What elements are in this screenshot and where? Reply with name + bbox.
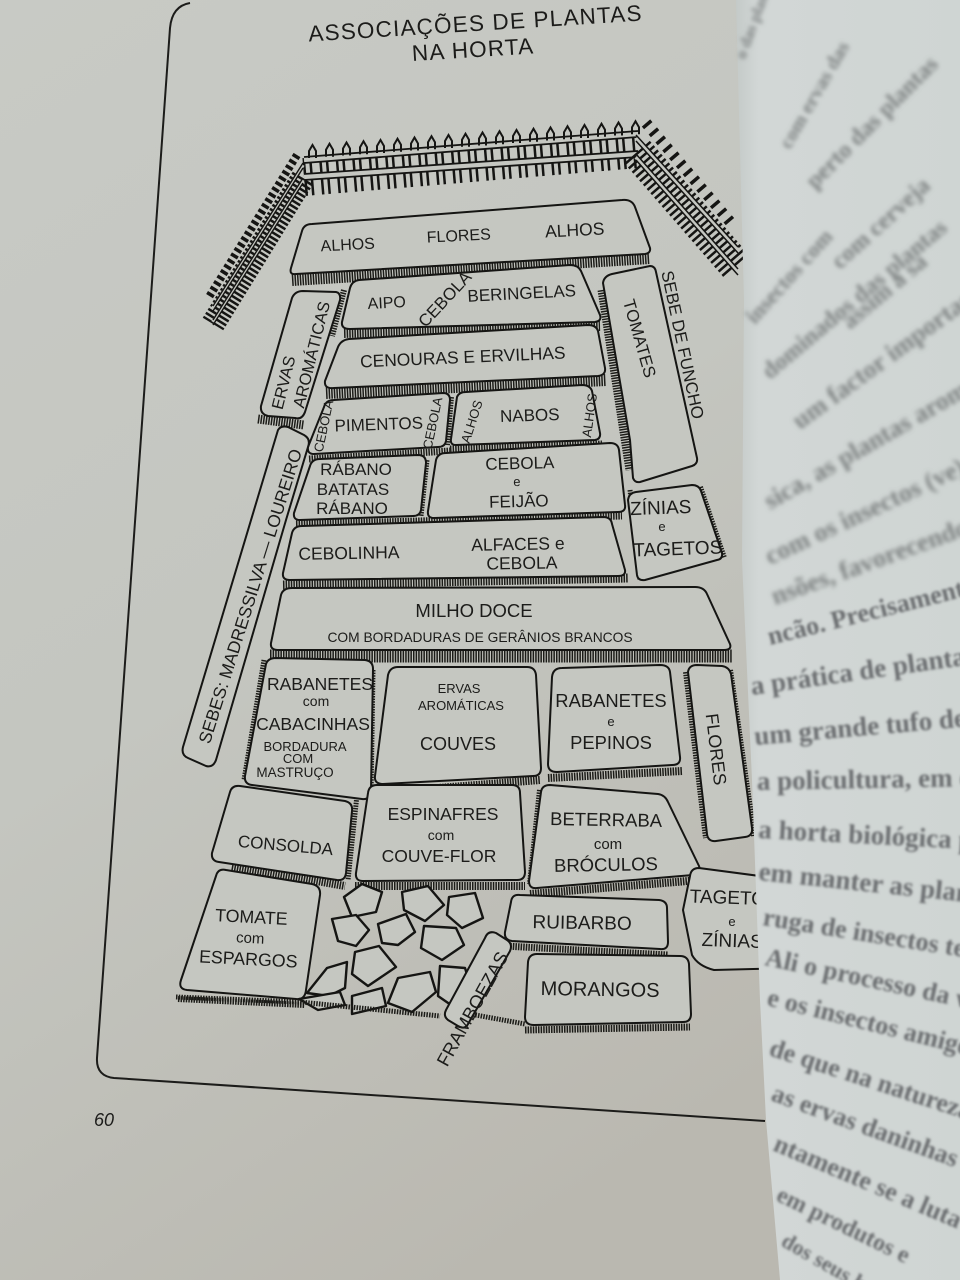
- blurred text: upper lines: dominados das plantas: [757, 215, 953, 385]
- bed: alhos, flores, alhos: ALHOS: [320, 236, 375, 255]
- bed: tagetes e zínias: [683, 868, 790, 970]
- bed: tomate com espargos: [180, 870, 320, 999]
- bed: zínias e tagetes: TAGETOS: [633, 537, 723, 562]
- bed: cebolinha, alfaces e cebola: CEBOLINHA: [298, 542, 400, 564]
- bed: rabanetes com cabacinhas: CABACINHAS: [256, 714, 370, 734]
- bed: morangos: [525, 954, 691, 1025]
- fence: back section: [304, 121, 639, 180]
- bed: pimentos: CEBOLA: [420, 395, 445, 450]
- bed: rabanetes e pepinos: PEPINOS: [570, 732, 652, 753]
- bed: cenouras e ervilhas: [325, 325, 605, 388]
- bed: alhos, flores, alhos: FLORES: [426, 226, 491, 247]
- right book page with blurred text: [733, 0, 960, 1280]
- bed: beterraba com bróculos: com: [594, 836, 622, 853]
- bed: cebola e feijão: FEIJÃO: [489, 491, 549, 512]
- bed: tomate com espargos: com: [236, 929, 265, 948]
- bed: aipo, cebola, beringelas: CEBOLA: [415, 267, 476, 331]
- blurred text: upper lines: assim a sa: [837, 249, 933, 335]
- fence: [209, 121, 738, 325]
- bed: ruibarbo: RUIBARBO: [532, 912, 632, 935]
- bed: framboezas: FRAMBOEZAS: [432, 948, 512, 1070]
- bed: rábano, batatas, rábano: BATATAS: [317, 480, 389, 499]
- bed: tagetes e zínias: e: [728, 914, 736, 929]
- bed: tomates, sebe de funcho: [603, 266, 707, 482]
- bed: cenouras e ervilhas: CENOURAS E ERVILHAS: [360, 343, 566, 371]
- bed: nabos: ALHOS: [579, 392, 600, 438]
- bed: ervas aromáticas, couves: ERVAS: [438, 681, 481, 696]
- bed: ervas aromáticas: ERVAS: [269, 354, 299, 411]
- blurred text: lower lines: em produtos e: [772, 1182, 914, 1269]
- bed: tomates, sebe de funcho: TOMATES: [619, 297, 660, 380]
- page frame: [97, 3, 765, 1121]
- bed: beterraba com bróculos: BETERRABA: [550, 808, 663, 831]
- page number: 60: [94, 1110, 114, 1130]
- bed: zínias e tagetes: [628, 485, 723, 580]
- bed: rabanetes com cabacinhas: BORDADURA: [263, 739, 347, 754]
- blurred text: upper lines: [733, 0, 960, 611]
- hedge hatching between beds: [178, 258, 754, 1030]
- title: ASSOCIAÇÕES DE PLANTAS: [308, 1, 643, 47]
- bed: pimentos: PIMENTOS: [334, 413, 423, 436]
- bed: rabanetes com cabacinhas: RABANETES: [267, 674, 373, 694]
- bed: sebes, madressilva, loureiro: SEBES: MADRESSILVA — LOUREIRO: [194, 446, 306, 746]
- bed: nabos: ALHOS: [458, 398, 486, 445]
- title: [308, 1, 645, 72]
- bed: cebolinha, alfaces e cebola: CEBOLA: [486, 552, 558, 574]
- blurred text: upper lines: perto das plantas: [801, 51, 944, 194]
- blurred text: upper lines: insectos com: [740, 224, 838, 328]
- bed: ervas aromáticas: AROMÁTICAS: [289, 299, 334, 410]
- bed: ervas aromáticas, couves: AROMÁTICAS: [418, 698, 504, 713]
- bed: espinafres com couve-flor: com: [428, 827, 454, 843]
- bed: beterraba com bróculos: [529, 785, 700, 888]
- bed: pimentos: CEBOLA: [311, 398, 336, 453]
- bed: tomates, sebe de funcho: SEBE DE FUNCHO: [657, 269, 707, 421]
- bed: cebolinha, alfaces e cebola: [283, 517, 625, 580]
- bed: beterraba com bróculos: BRÓCULOS: [554, 853, 658, 876]
- bed: milho doce: MILHO DOCE: [415, 600, 533, 621]
- bed: flores: [688, 665, 752, 841]
- bed: consolda: [212, 786, 352, 880]
- title: NA HORTA: [411, 33, 535, 66]
- bed: rábano, batatas, rábano: [294, 455, 426, 520]
- bed: milho doce: COM BORDADURAS DE GERÂNIOS BRANCOS: [327, 629, 633, 645]
- bed: nabos: NABOS: [500, 405, 560, 426]
- bed: rabanetes e pepinos: RABANETES: [555, 690, 667, 711]
- bed: ervas aromáticas, couves: [375, 667, 541, 784]
- bed: tagetes e zínias: ZÍNIAS: [701, 930, 763, 953]
- bed: ruibarbo: [505, 895, 668, 949]
- bed: rabanetes com cabacinhas: [245, 658, 373, 799]
- bed: espinafres com couve-flor: COUVE-FLOR: [382, 846, 496, 866]
- bed: ervas aromáticas, couves: COUVES: [420, 734, 496, 754]
- bed: zínias e tagetes: ZÍNIAS: [630, 497, 692, 520]
- bed: flores: FLORES: [702, 712, 730, 786]
- bed: espinafres com couve-flor: [356, 785, 525, 881]
- bed: milho doce: [271, 587, 730, 650]
- bed: rabanetes com cabacinhas: COM: [283, 751, 313, 766]
- blurred text: lower lines: [749, 563, 960, 1280]
- bed: aipo, cebola, beringelas: AIPO: [367, 294, 406, 313]
- bed: morangos: MORANGOS: [540, 978, 660, 1002]
- bed: cebolinha, alfaces e cebola: ALFACES e: [471, 533, 565, 555]
- bed: cebola e feijão: e: [513, 474, 521, 489]
- bed: rabanetes e pepinos: [548, 665, 680, 772]
- bed: ervas aromáticas: [261, 291, 340, 418]
- bed: aipo, cebola, beringelas: BERINGELAS: [467, 281, 576, 306]
- bed: tomate com espargos: TOMATE: [215, 905, 288, 929]
- bed: consolda: CONSOLDA: [237, 832, 334, 859]
- bed: alhos, flores, alhos: [291, 200, 650, 274]
- blurred text: upper lines: com cerveja: [827, 173, 936, 274]
- bed: rabanetes com cabacinhas: MASTRUÇO: [256, 765, 334, 780]
- fence: left section: [209, 155, 303, 325]
- bed: rabanetes e pepinos: e: [607, 714, 615, 729]
- stepping stones path: [299, 884, 483, 1014]
- bed: cebola e feijão: CEBOLA: [485, 453, 555, 474]
- bed: cebola e feijão: [428, 443, 625, 518]
- bed: tomate com espargos: ESPARGOS: [199, 946, 298, 972]
- fence: right section: [636, 123, 738, 275]
- bed: rabanetes com cabacinhas: com: [303, 693, 329, 709]
- bed: aipo, cebola, beringelas: [342, 265, 600, 331]
- bed: rábano, batatas, rábano: RÁBANO: [316, 499, 388, 518]
- ground line: [176, 997, 525, 1024]
- bed: zínias e tagetes: e: [658, 519, 666, 534]
- bed: pimentos: [308, 393, 450, 454]
- bed: espinafres com couve-flor: ESPINAFRES: [388, 804, 498, 824]
- bed: alhos, flores, alhos: ALHOS: [545, 218, 605, 242]
- bed: tagetes e zínias: TAGETOS: [689, 886, 779, 911]
- bed: rábano, batatas, rábano: RÁBANO: [320, 460, 392, 479]
- blurred text: upper lines: com ervas das: [775, 37, 854, 152]
- bed: nabos: [451, 385, 600, 445]
